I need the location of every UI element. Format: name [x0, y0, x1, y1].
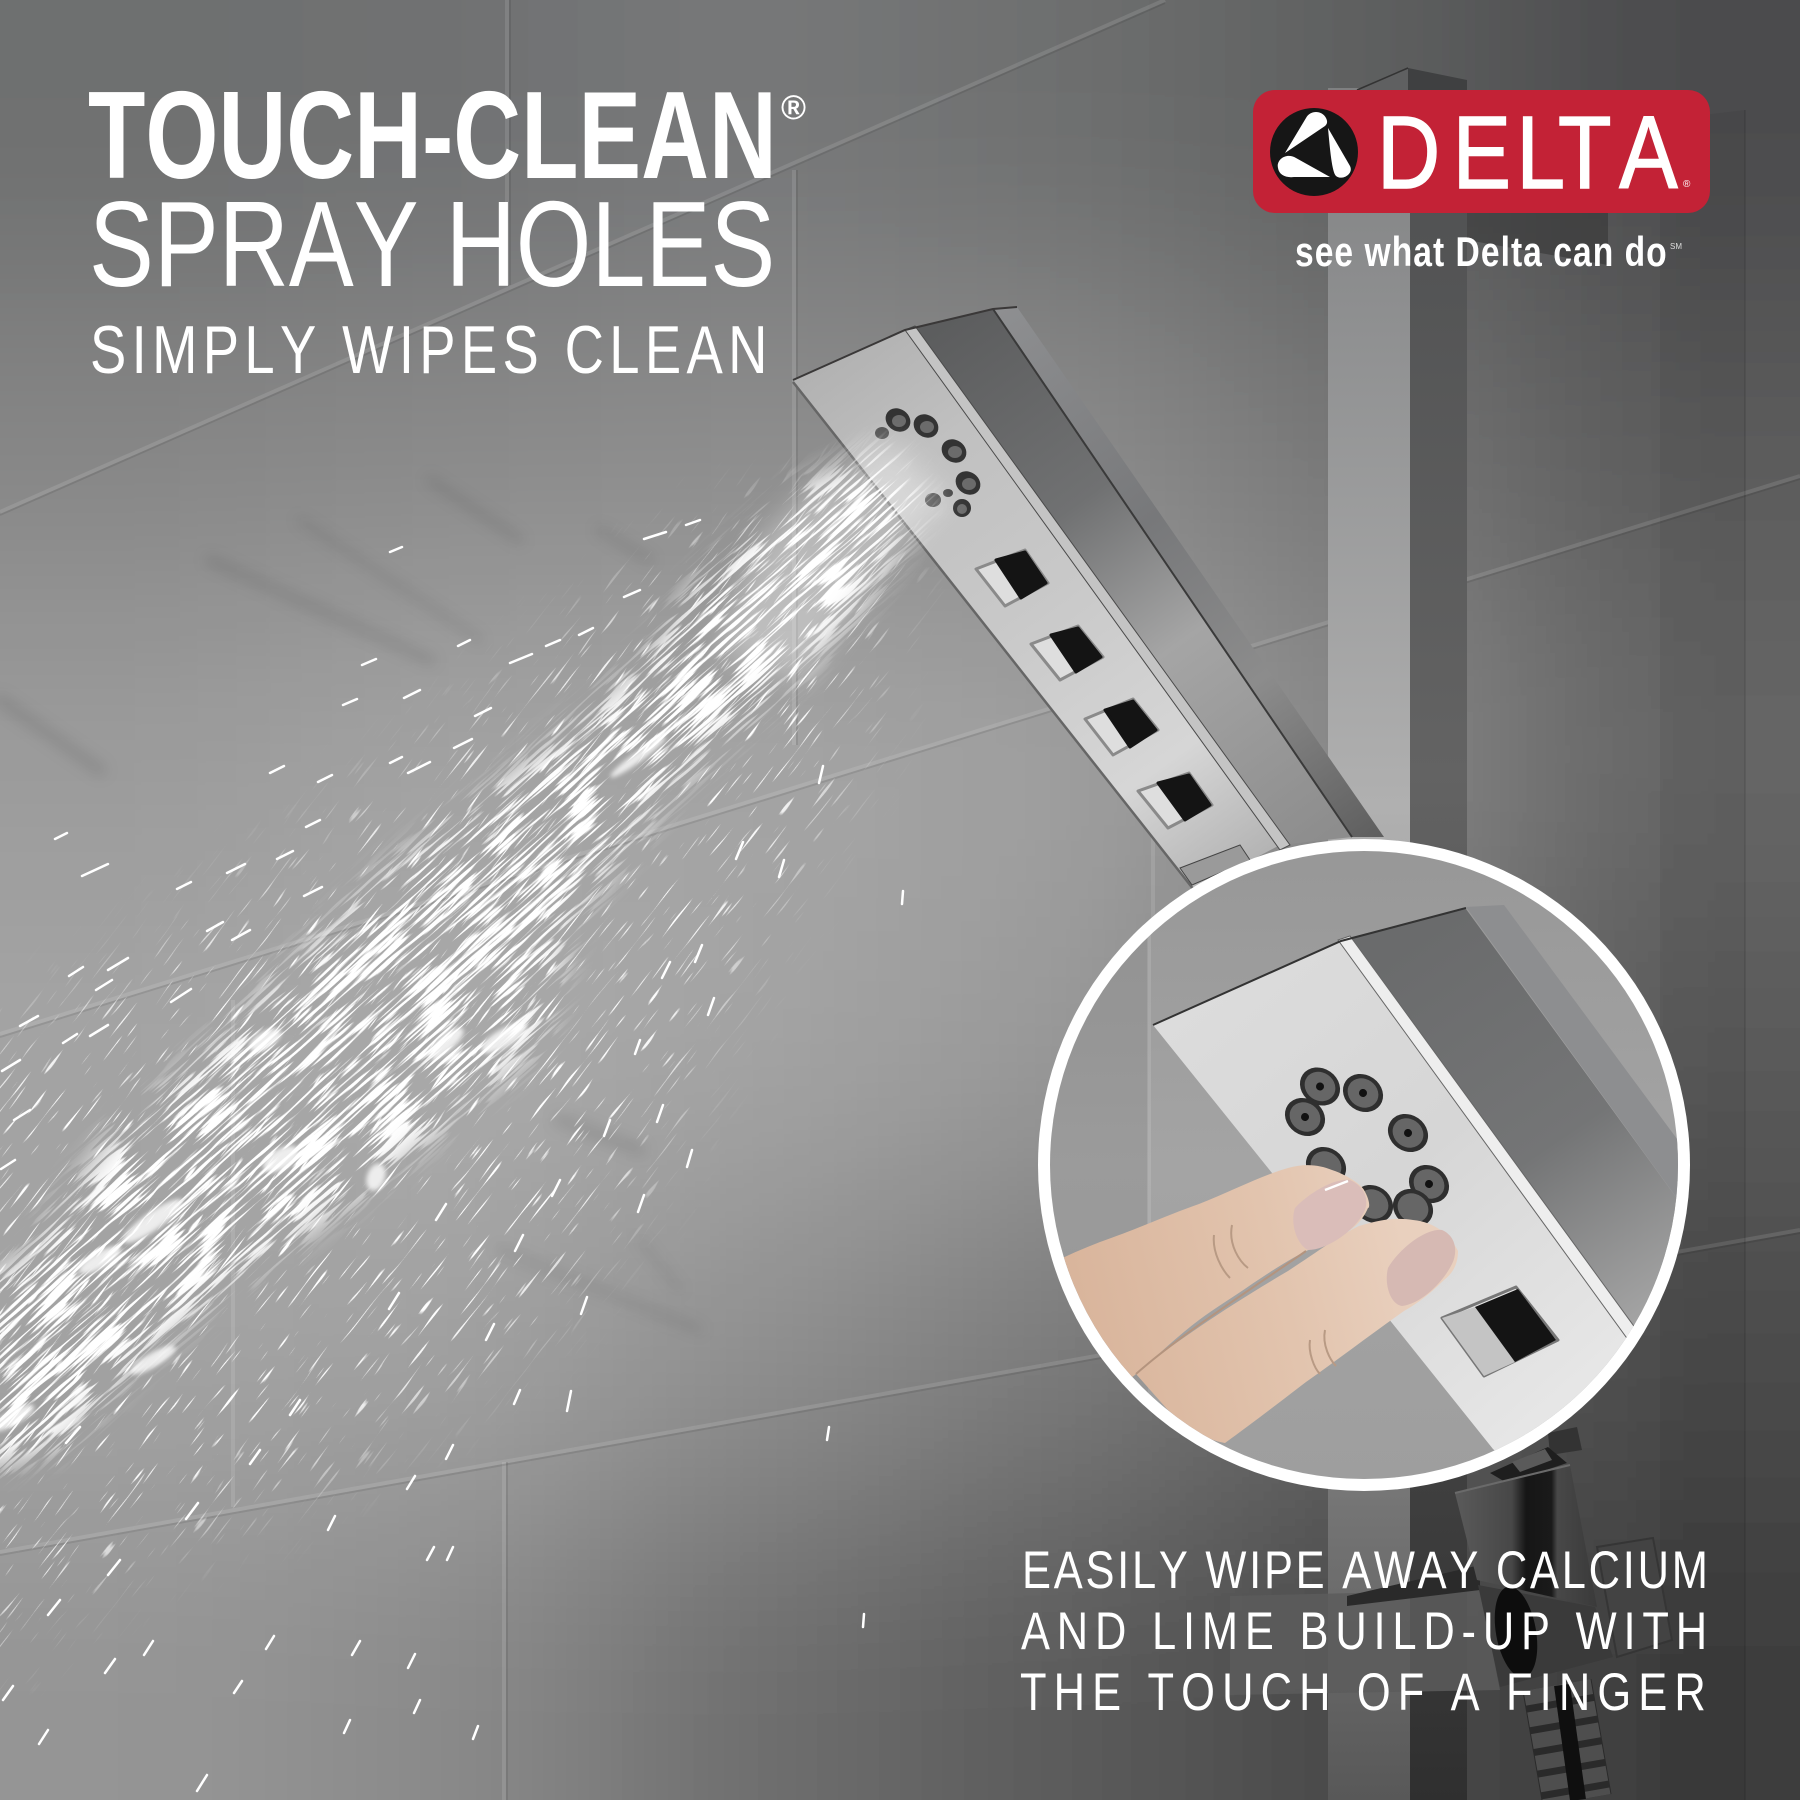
hose [1523, 1679, 1612, 1800]
caption line 1: EASILY WIPE AWAY CALCIUM [1022, 1541, 1711, 1600]
title: spray holes: SPRAY HOLES [89, 177, 775, 313]
lower finger [1136, 1219, 1458, 1443]
slide bar [1328, 68, 1608, 1800]
callout button [1442, 1287, 1558, 1376]
caption [1020, 1541, 1714, 1722]
hand shower front face [793, 330, 1280, 890]
icon: delta triangle mark [1270, 108, 1358, 196]
hand-placed droplets upper side [1, 520, 700, 1169]
callout photo [1050, 851, 1678, 1479]
callout handle front face [1154, 942, 1626, 1450]
bracket right plate [1597, 1538, 1672, 1657]
dense spray streaks [0, 432, 940, 1480]
hand shower head [793, 307, 1384, 890]
button 4 [1138, 773, 1212, 828]
button 3 [1085, 699, 1158, 755]
registered mark: ® [781, 89, 806, 127]
button 2 [1031, 626, 1103, 680]
hand shower ridge highlight [905, 326, 1290, 850]
detail callout circle [1030, 830, 1700, 1510]
holder lower body [1478, 1585, 1613, 1687]
bracket left block [1230, 1590, 1500, 1695]
fingers [1040, 1165, 1458, 1443]
bright water clusters [0, 733, 668, 1436]
sparse spray streaks [0, 448, 928, 1676]
Delta logo [1253, 90, 1710, 276]
hand-placed droplets lower side [3, 766, 903, 1791]
hand shower side face [911, 309, 1352, 845]
upper finger [1040, 1165, 1369, 1380]
caption line 2: AND LIME BUILD-UP WITH [1021, 1602, 1714, 1661]
title block [88, 66, 806, 388]
callout handle side face [1352, 909, 1676, 1325]
holder upper body [1455, 1465, 1597, 1607]
spray glow near nozzles [720, 440, 950, 680]
wall bracket and hose holder [1230, 1427, 1672, 1695]
tagline: see what Delta can do [1295, 230, 1668, 276]
caption line 3: THE TOUCH OF A FINGER [1020, 1663, 1713, 1722]
hand shower back face [993, 307, 1384, 837]
spray nozzles [875, 404, 985, 517]
callout spray holes [1277, 1060, 1457, 1235]
tagline service mark: SM [1670, 242, 1682, 251]
logo registered mark: ® [1683, 179, 1691, 190]
callout handle back face [1466, 905, 1678, 1198]
holder neck [1490, 1447, 1567, 1483]
button 1 [976, 550, 1048, 606]
subtitle: SIMPLY WIPES CLEAN [90, 312, 773, 388]
holder collar [1548, 1427, 1582, 1455]
logo wordmark: DELTA [1377, 95, 1678, 211]
title: touch-clean: TOUCH-CLEAN [88, 66, 777, 205]
spray buttons [976, 550, 1212, 828]
logo red badge [1253, 90, 1710, 213]
callout white ring [1038, 839, 1690, 1491]
